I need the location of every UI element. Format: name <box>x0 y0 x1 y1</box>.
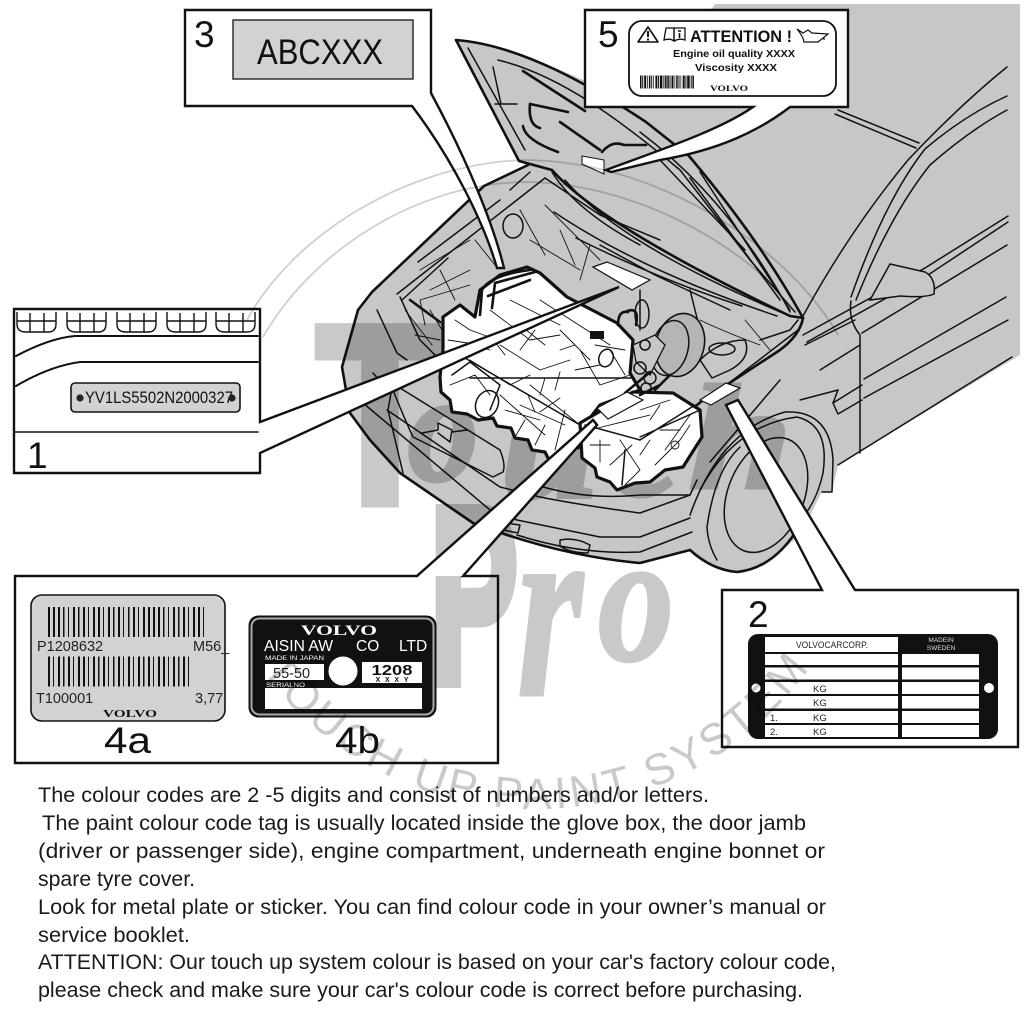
watermark script word Touch: o <box>408 342 478 514</box>
icon: warning triangle <box>638 27 658 42</box>
windscreen vent row <box>17 312 255 332</box>
type plate: 1. <box>770 713 778 724</box>
watermark script word Touch <box>316 273 793 558</box>
label 4b: SERIALNO <box>266 683 305 689</box>
body text: Look for metal plate or sticker. You can find colour code in your owner’s manual or <box>38 896 826 919</box>
body text: The colour codes are 2 -5 digits and consist of numbers and/or letters. <box>38 784 709 807</box>
label 4a: M56_ <box>193 639 230 655</box>
callout 4: gearbox labels <box>15 420 597 763</box>
type plate: KG <box>813 713 827 724</box>
callout 5 frame and pointer <box>585 10 848 172</box>
label 4a <box>31 595 230 721</box>
type plate: MADEIN <box>928 637 954 644</box>
callout 3: registration plate <box>185 10 504 268</box>
callout 3 frame and pointer <box>185 10 504 268</box>
door, windscreen and mirror <box>803 67 1012 465</box>
plate ABCXXX <box>233 20 413 79</box>
watermark ring arcs <box>247 160 838 337</box>
car body silhouette <box>342 4 1020 572</box>
callout 2 frame and pointer <box>722 400 1018 747</box>
watermark script word Touch: c <box>610 344 682 532</box>
label 4b: 55-50 <box>273 666 310 682</box>
watermark word Pro <box>430 456 674 752</box>
left fender and engine bay edge <box>358 165 798 365</box>
plate ABCXXX: ABCXXX <box>257 33 383 72</box>
VIN plate: YV1LS5502N2000327 <box>85 389 233 407</box>
label 4b: LTD <box>399 638 427 655</box>
callout 4 pointer <box>417 420 597 576</box>
watermark word Pro: r <box>517 464 586 752</box>
callout 1 frame and pointer <box>14 287 619 473</box>
barcode <box>640 76 694 88</box>
caption 4b: 4b <box>335 720 380 761</box>
location sticker on bulkhead <box>593 262 650 290</box>
bonnet sticker <box>582 156 604 174</box>
body text: service booklet. <box>38 924 190 947</box>
barcode top <box>48 607 205 637</box>
label 4a: VOLVO <box>103 708 158 720</box>
attention sticker: ATTENTION ! <box>690 28 792 46</box>
front bumper and grille <box>342 310 697 563</box>
callout 1: chassis number <box>14 287 619 476</box>
icon: manual book <box>664 28 685 41</box>
label 4b: 1208 <box>372 663 412 679</box>
watermark script word Touch: u <box>500 329 600 539</box>
watermark word Pro: o <box>598 496 674 701</box>
type plate: SWEDEN <box>927 645 956 652</box>
label 4b <box>248 616 436 718</box>
label 4b: XXXY <box>376 677 409 684</box>
number 2: 2 <box>748 594 769 635</box>
type plate: KG <box>813 698 827 709</box>
watermark script word Touch: h <box>688 355 793 521</box>
number 5: 5 <box>598 14 619 55</box>
VIN plate <box>71 383 240 412</box>
body text: please check and make sure your car's colour code is correct before purchasing. <box>38 979 803 1002</box>
callout 4 frame <box>15 420 597 763</box>
body text: ATTENTION: Our touch up system colour is based on your car's factory colour code, <box>38 951 836 974</box>
engine and gearbox <box>440 262 740 490</box>
wing mirror <box>870 264 934 300</box>
alternator and ancillaries <box>633 308 711 393</box>
callout 5: attention sticker <box>585 10 848 172</box>
location sticker on gearbox <box>597 392 643 419</box>
label 4b: VOLVO <box>301 623 377 639</box>
engine block <box>440 267 640 462</box>
watermark script word Pro and arc lettering <box>246 159 839 810</box>
number 3: 3 <box>194 14 215 55</box>
label 4b: CO <box>356 638 379 655</box>
label 4a: P1208632 <box>37 639 103 655</box>
gearbox <box>580 372 702 490</box>
type plate: KG <box>813 684 827 695</box>
attention sticker <box>629 21 836 96</box>
label 4a: T100001 <box>36 691 93 707</box>
number 1: 1 <box>27 435 48 476</box>
attention sticker: VOLVO <box>710 84 748 93</box>
type plate: KG <box>813 727 827 738</box>
bonnet underside <box>456 40 803 318</box>
car illustration <box>342 4 1020 572</box>
label 4b: AISIN AW <box>264 638 333 655</box>
type plate <box>748 634 998 739</box>
watermark arc text: TOUCH UP PAINT SYSTEM <box>268 654 807 810</box>
icon: oil can <box>797 29 828 42</box>
badge on grille <box>422 423 467 442</box>
body text: (driver or passenger side), engine compartment, underneath engine bonnet or <box>38 840 825 863</box>
type plate: 2. <box>770 727 778 738</box>
caption 4a: 4a <box>104 720 151 761</box>
type plate: VOLVOCARCORP. <box>796 640 868 650</box>
body text: The paint colour code tag is usually located inside the glove box, the door jamb <box>42 812 806 835</box>
right fender, wheel and tyre <box>632 318 838 572</box>
label 4b: MADE IN JAPAN <box>265 655 324 662</box>
location sticker on wheel arch <box>700 383 740 405</box>
attention sticker: Viscosity XXXX <box>695 63 777 74</box>
watermark script word Touch: T <box>316 273 444 558</box>
body text: spare tyre cover. <box>38 868 195 891</box>
attention sticker: Engine oil quality XXXX <box>673 49 795 60</box>
body text <box>38 784 836 1002</box>
label 4a: 3,77 <box>195 691 223 707</box>
barcode bottom <box>48 656 190 686</box>
watermark word Pro: P <box>430 456 518 735</box>
callout 2: type plate <box>722 400 1018 747</box>
